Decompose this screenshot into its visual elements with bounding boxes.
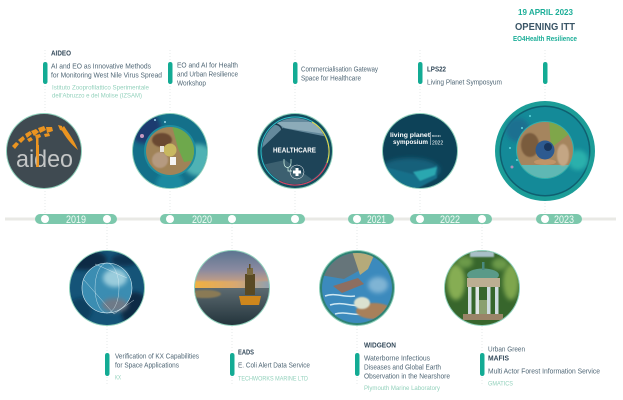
text: WIDGEON: WIDGEON — [364, 342, 396, 350]
text: AIDEO: dell'Abruzzo e del Molise (IZSAM) — [52, 92, 142, 100]
text: MAFIS: Multi Actor Forest Information Service — [488, 368, 600, 376]
year pill: 2020 — [160, 214, 305, 226]
text: EO and AI workshop: EO and AI for Health — [177, 62, 238, 70]
text: opening ITT — [513, 7, 577, 43]
text: EADS: E. Coli Alert Data Service — [238, 362, 310, 370]
year pill: 2019: 2019 — [66, 214, 86, 226]
text: WIDGEON — [364, 342, 450, 392]
text: WIDGEON: Plymouth Marine Laboratory — [364, 385, 441, 392]
text: MAFIS — [488, 346, 600, 388]
text: EADS — [238, 350, 310, 382]
text: EO and AI workshop: Workshop — [177, 80, 206, 88]
text: KX: for Space Applications — [115, 362, 179, 370]
image: aideo logo: aideo — [16, 146, 73, 173]
image: healthcare — [257, 113, 333, 189]
text: AIDEO: AIDEO — [51, 50, 71, 58]
year pill: 2019 — [35, 214, 117, 226]
text: LPS22: LPS22 — [427, 66, 446, 74]
image: living planet symposium: 2022 — [432, 140, 443, 146]
text: EO and AI workshop: and Urban Resilience — [177, 72, 238, 78]
text: WIDGEON: Waterborne Infectious — [364, 356, 430, 362]
image: aideo logo — [6, 113, 82, 189]
text: AIDEO — [51, 50, 162, 100]
text: MAFIS: Urban Green — [488, 346, 525, 354]
text: EADS: EADS — [238, 350, 254, 356]
image: opening ITT — [495, 101, 595, 201]
text: WIDGEON: Diseases and Global Earth — [364, 364, 441, 372]
image: buoy at sunset — [189, 250, 270, 328]
text: KX — [115, 354, 199, 382]
marker bars — [43, 62, 548, 376]
year pill: 2021 — [348, 214, 394, 226]
text: opening ITT: OPENING ITT — [515, 22, 575, 33]
text: MAFIS: GMATICS — [488, 380, 513, 388]
text: LPS22 — [427, 66, 502, 86]
text: EO and AI workshop — [177, 62, 238, 88]
image: living planet symposium — [380, 113, 458, 190]
text: AIDEO: for Monitoring West Nile Virus Spread — [51, 72, 162, 80]
year pill: 2023: 2023 — [554, 214, 574, 226]
year pill: 2022 — [410, 214, 492, 226]
text: KX: Verification of KX Capabilities — [115, 354, 199, 360]
image: EO and AI — [132, 113, 208, 189]
image: living planet symposium: BONN — [432, 134, 441, 138]
text: EADS: TECHWORKS MARINE LTD — [238, 376, 308, 382]
image: healthcare: HEALTHCARE — [273, 146, 316, 154]
year pill: 2020: 2020 — [192, 214, 212, 226]
year pill: 2022: 2022 — [440, 214, 460, 226]
image: waterborne — [319, 250, 395, 326]
text: Commercialisation Gateway: Space for Healthcare — [301, 76, 361, 82]
text: AIDEO: AI and EO as Innovative Methods — [51, 64, 151, 70]
timeline — [5, 214, 616, 226]
text: LPS22: Living Planet Symposyum — [427, 80, 502, 86]
text: Commercialisation Gateway: Commercialisation Gateway — [301, 66, 378, 74]
year pill: 2021: 2021 — [367, 214, 386, 226]
text: WIDGEON: Observation in the Nearshore — [364, 374, 450, 380]
text: MAFIS: MAFIS — [488, 356, 509, 362]
image: living planet symposium: living planet — [390, 132, 431, 139]
image: living planet symposium: symposium — [393, 139, 428, 146]
image: globe — [69, 250, 145, 326]
text: AIDEO: Istituto Zooprofilattico Sperimentale — [52, 84, 149, 92]
year pill: 2023 — [536, 214, 582, 226]
text: KX: KX — [115, 374, 121, 382]
text: opening ITT: EO4Health Resilience — [513, 36, 577, 43]
text: opening ITT: 19 APRIL 2023 — [518, 7, 573, 17]
text: Commercialisation Gateway — [301, 66, 378, 82]
image: temple in park — [444, 250, 520, 326]
